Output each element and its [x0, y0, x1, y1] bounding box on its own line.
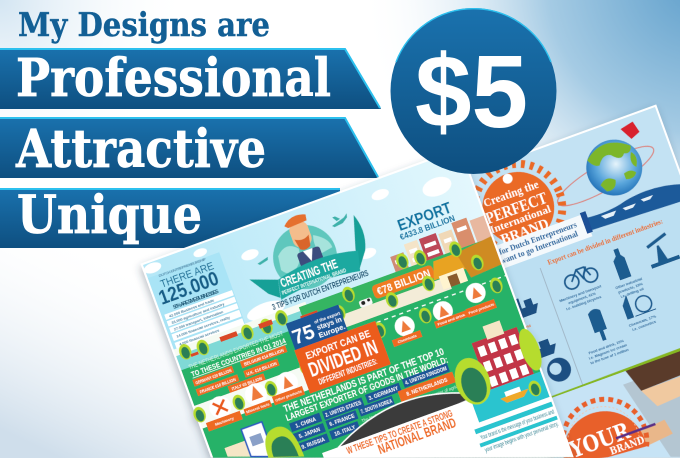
ribbon: Creating the Perfect International Brand: PERFECT INTERNATIONAL BRAND [281, 268, 348, 297]
callout: export can be divided: DIFFERENT INDUSTRIES: [317, 357, 379, 387]
icon: oil bottle [613, 248, 632, 280]
arch over the brand panel [328, 380, 473, 456]
heading: Netherlands top 10: THE NETHERLANDS IS PART OF THE TOP 10 [282, 347, 446, 415]
ribbon: Creating the Perfect International Brand: CREATING THE [278, 256, 340, 291]
table: top 10 exporters: 8. NETHERLANDS [406, 377, 449, 398]
lower sky [552, 371, 680, 458]
text: lower captions: I.e. cosmetics [632, 320, 657, 332]
panel: tips for an international brand: NATIONAL BRAND [376, 414, 458, 457]
text: export total [396, 202, 455, 240]
table of businesses [164, 290, 244, 349]
lower poster tint [486, 198, 680, 404]
chips: top export countries: FRANCE €10 BILLION [199, 377, 237, 395]
badge: Your Brand [563, 396, 656, 458]
panel: tips for an international brand: Your brand is the message of your business and [479, 408, 555, 442]
clouds [144, 176, 452, 321]
poster: brand infographic (back) [452, 104, 680, 458]
callout: 75 percent stays in Europe: Europe. [317, 322, 347, 340]
tree cluster lower left and right [257, 326, 550, 458]
panel: 125.000 businesses: 125.000 [156, 268, 222, 310]
panel: tips for an international brand [321, 372, 572, 458]
price badge: $5 [415, 34, 528, 149]
text: ship labels: in the world [509, 323, 532, 335]
ribbon: Creating the Perfect International Brand: 3 TIPS FOR DUTCH ENTREPRENEURS [271, 268, 370, 312]
grass line [552, 348, 680, 398]
text: bicycle caption: Machinery and transport [559, 284, 603, 303]
text: second largest exporter note: The Netherlands is the second largest exporter of agricultural [361, 380, 469, 424]
heading: Netherlands top 10: LARGEST EXPORTER OF GOODS IN THE WORLD: [284, 355, 449, 423]
text: bicycle caption: equipment, 41% [568, 291, 597, 305]
wave with ships [588, 184, 680, 230]
callout: export can be divided: EXPORT CAN BE [304, 329, 372, 362]
badge: Creating the Perfect International Brand: BRAND [499, 216, 551, 248]
callout: export can be divided [294, 321, 391, 394]
table: top 10 exporters: 10. ITALY [334, 425, 357, 438]
icon: cow [358, 297, 373, 308]
ribbon: Creating the Perfect International Brand [250, 215, 369, 310]
badge: Creating the Perfect International Brand: Creating the [482, 179, 541, 210]
chips: industries: Food and drink [437, 312, 466, 327]
callout: 75 percent stays in Europe: of the export [313, 311, 341, 325]
badge: Creating the Perfect International Brand: PERFECT [483, 188, 550, 228]
text: lower captions: to the tune of 1 million [590, 348, 630, 365]
text: oil caption: products, 19% [618, 282, 644, 295]
houses row [390, 216, 492, 272]
chips: industries: Chemicals [397, 333, 418, 344]
callout: 75 percent stays in Europe [286, 305, 348, 350]
icon: red townhouse [468, 316, 534, 392]
badge: Your Brand: BRAND [609, 435, 646, 458]
text: ship labels: of the top [507, 318, 526, 330]
white band with industry icons [189, 276, 519, 429]
text: oil caption [615, 278, 644, 298]
text: bicycle caption [559, 285, 602, 310]
table: top 10 exporters: 2. UNITED STATES [325, 400, 363, 419]
poster: Creating the Perfect International Brand (front) [139, 145, 578, 458]
ribbon: for Dutch Entrepreneurs: for Dutch Entrepreneurs [497, 219, 579, 257]
panel: 125.000 businesses: THERE ARE [159, 260, 216, 291]
table: top 10 exporters: 3. GERMANY [368, 386, 400, 402]
text: ship labels [524, 320, 531, 328]
ribbon: for Dutch Entrepreneurs: want to go International [499, 228, 580, 266]
chips: top export countries: U.K. €10 BILLION [246, 361, 278, 377]
icon: planes [258, 213, 348, 265]
icon: second ship [538, 338, 556, 358]
icon: popsicle [588, 308, 607, 341]
chips: industries: Other products [274, 388, 303, 403]
chips: industries [200, 299, 503, 431]
text: lower captions: I.e. Magnum ice cream [588, 343, 628, 361]
callout: export can be divided: DIVIDED IN [306, 337, 381, 382]
table: top 10 exporters: 6. FRANCE [329, 413, 356, 428]
table of businesses: 33.000 agriculture and industry [171, 302, 226, 325]
price badge [390, 8, 556, 174]
man in shirt [623, 351, 680, 457]
icon: ship [516, 298, 538, 318]
chips: top export countries: GERMANY €20 BILLION [195, 368, 233, 386]
boats and red buildings on river [188, 303, 320, 364]
text: second largest exporter note: products worldwide, after the United States. [363, 397, 441, 429]
icon: bicycle [564, 266, 599, 290]
table: top 10 exporters: 4. UNITED KINGDOM [404, 366, 448, 387]
text: lower captions [588, 315, 656, 364]
river band [174, 240, 482, 370]
banner: Attractive: Attractive [15, 119, 266, 180]
table of businesses: 4.000 financial services [179, 329, 220, 347]
chips: top export countries: BELGIUM €14 BILLION [243, 348, 285, 368]
chips: top export countries: ITALY €6 BILLION [231, 376, 263, 392]
icon: globe with kite [556, 122, 654, 207]
panel: tips for an international brand: W THESE TIPS TO CREATE A STRONG [345, 408, 454, 457]
callout: 78 billion: €78 BILLION [375, 268, 432, 298]
green field [181, 255, 572, 458]
heading: My Designs are: My Designs are [18, 5, 270, 44]
text: lower captions: Chemicals, 17% [628, 314, 657, 328]
divider line [540, 268, 583, 385]
icon: pumpjack [646, 232, 680, 269]
banner: Professional: Professional [16, 48, 331, 109]
icons: industry circles [200, 280, 496, 421]
ribbon: for Dutch Entrepreneurs [496, 211, 593, 268]
badge: Creating the Perfect International Brand [475, 160, 566, 245]
panel: tips for an international brand: your image begins with your personal story. [484, 421, 560, 454]
banner: Unique: Unique [17, 185, 202, 246]
table: top 10 exporters: 7. SOUTH KOREA [360, 399, 394, 416]
table: top 10 exporters: 9. RUSSIA [301, 437, 326, 451]
text: exported the most: TO THESE COUNTRIES IN Q1 2014 [191, 338, 287, 379]
table of businesses: 14.000 financial services, realty [176, 315, 231, 339]
chips: industries: Food products [468, 301, 495, 315]
table of businesses: 42.000 Business and trade [169, 298, 215, 319]
text: export total: €433.8 BILLION [399, 214, 456, 242]
callout: 75 percent stays in Europe: stays in [316, 317, 343, 332]
text: exported the most: THE NETHERLANDS EXPORTED THE MOST [188, 330, 284, 371]
trees [166, 224, 512, 426]
table: top 10 exporters: 1. CHINA [295, 417, 317, 430]
text: oil caption: Other industrial [615, 277, 643, 290]
icon: dutch house left [220, 422, 274, 458]
icon: farmhouse [426, 236, 503, 292]
panel: 125.000 businesses [148, 252, 245, 349]
text: oil caption: I.e. drilling oil [620, 287, 644, 299]
badge: Creating the Perfect International Brand: International [488, 203, 553, 236]
table of businesses: 27.000 transport, information [173, 310, 225, 332]
chips: industries: Machinery [214, 415, 235, 427]
panel: 125.000 businesses: 50% ARE SME BUSINESSES [173, 289, 220, 311]
table: top 10 exporters [288, 362, 460, 453]
table: top 10 exporters: 5. JAPAN [298, 427, 322, 440]
callout: 75 percent stays in Europe: 75 [290, 321, 318, 349]
text: bicycle caption: I.e. building bicycles [566, 295, 602, 311]
chips: top export countries [192, 345, 294, 404]
illustration: bearded man and globe [272, 214, 338, 290]
banner: Unique [0, 185, 340, 248]
chips: industries: Mineral fuels [245, 401, 271, 414]
icon: lipstick and loop [622, 294, 656, 320]
text: export total: EXPORT [395, 200, 454, 235]
panel: 125.000 businesses: DUTCH ENTREPRENEURSHIP [158, 256, 207, 278]
text: lower captions: Food and drink, 10% [588, 339, 625, 355]
icon: small globe [546, 357, 572, 382]
